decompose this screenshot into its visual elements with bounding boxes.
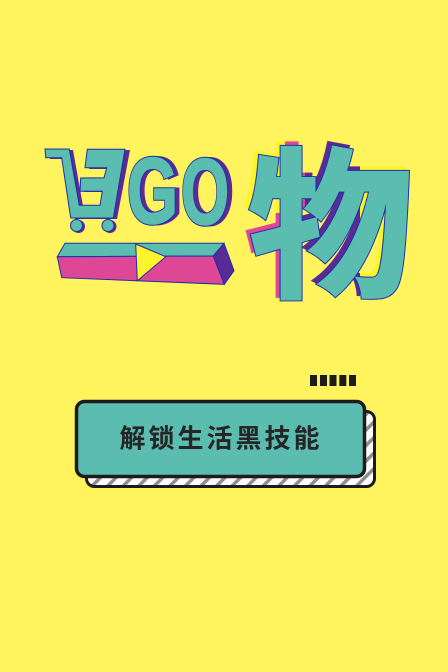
extrusion faces: 物: [244, 135, 409, 316]
GO lettering: O: [186, 139, 234, 244]
banner text: 解锁生活黑技能: [119, 424, 323, 454]
GO lettering: G: [127, 140, 178, 244]
GO lettering: G: [131, 140, 182, 244]
decoration: five small squares: [310, 375, 356, 386]
extrusion faces: 物: [244, 135, 409, 316]
icon: shopping cart: [45, 149, 130, 233]
banner: [76, 402, 374, 486]
banner: striped back plate: [86, 412, 374, 486]
GO lettering: O: [181, 139, 229, 244]
glyph: 物: [248, 138, 413, 319]
物 lettering: [244, 140, 410, 302]
banner: teal front plate: [76, 402, 364, 476]
GO lettering: O: [181, 139, 229, 244]
glyph: 物: [248, 138, 413, 319]
3D bar with play arrow: [57, 243, 234, 284]
GO lettering: G: [127, 140, 178, 244]
GO lettering: [127, 139, 234, 244]
logo: [44, 140, 410, 302]
extrusion faces: 物: [244, 135, 409, 316]
